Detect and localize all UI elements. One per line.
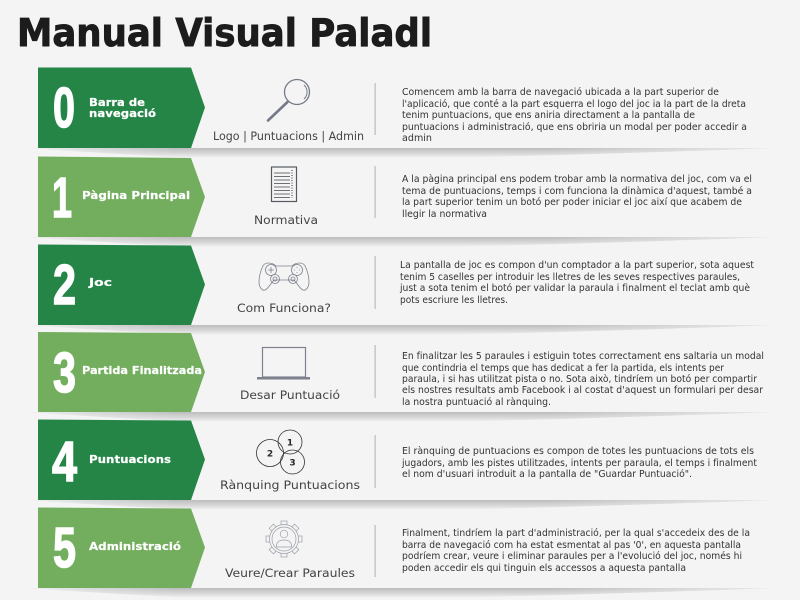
title: Manual Visual Paladl: [17, 11, 432, 56]
number 2: 2: [53, 253, 76, 317]
text block 1: la part superior tenim un botó per poder iniciar el joc així que acabem de: [402, 197, 742, 208]
chevron 1: [38, 156, 205, 237]
text block 2: tenim 5 caselles per introduir les lletres de les seves respectives paraules,: [400, 272, 740, 283]
text block 4: el nom d'usuari introduit a la pantalla de "Guardar Puntuació".: [402, 469, 692, 480]
heading: Barra de navegació: Barra de: [89, 96, 145, 109]
number 4: 4: [52, 430, 77, 494]
label: Desar Puntuació: Desar Puntuació: [240, 389, 340, 402]
text block 5: podríem crear, veure i eliminar paraules per a l'evolució del joc, només hi: [402, 551, 742, 562]
text block 5: [402, 528, 750, 574]
text block 5: barra de navegació com ha estat esmentat al pas '0', en aquesta pantalla: [402, 540, 741, 551]
text block 0: puntuacions i administració, que ens obriria un modal per poder accedir a: [402, 122, 747, 133]
icon: gear with user: [266, 521, 302, 557]
label: Normativa: Normativa: [254, 214, 318, 227]
heading: Puntuacions: Puntuacions: [89, 453, 171, 466]
chevron 4: [38, 420, 205, 500]
divider 3: [374, 345, 376, 398]
heading: Barra de navegació: [89, 96, 156, 120]
text block 0: [402, 87, 747, 144]
text block 0: Comencem amb la barra de navegació ubicada a la part superior de: [402, 87, 719, 98]
text block 2: La pantalla de joc es compon d'un comptador a la part superior, sota aquest: [400, 260, 754, 271]
text block 3: que contindria el temps que has dedicat a fer la partida, els intents per: [402, 363, 724, 374]
text block 2: pots escriure les lletres.: [400, 295, 508, 306]
text block 5: poden accedir els qui tinguin els accessos a aquesta pantalla: [402, 563, 686, 574]
text block 4: jugadors, amb les pistes utilitzades, intents per paraula, el temps i finalment: [401, 458, 757, 469]
icon: ranking circles: 3: [289, 458, 296, 468]
text block 3: els nostres resultats amb Facebook i al costat d'aquest un formulari per desar: [402, 385, 763, 396]
heading: Partida Finalitzada: Partida Finalitzada: [82, 364, 202, 377]
panel: step 3: [38, 332, 764, 412]
icon: laptop: [257, 348, 310, 380]
icon: document: [272, 167, 296, 202]
divider 5: [374, 525, 376, 577]
text block 1: llegir la normativa: [402, 209, 487, 220]
panel: step 5: [38, 508, 750, 588]
divider 2: [374, 256, 376, 309]
text block 0: admin: [402, 133, 432, 144]
panel: step 2: [38, 244, 754, 325]
chevron 5: [38, 508, 205, 588]
panel: step 0: [38, 68, 747, 148]
divider 0: [374, 83, 376, 135]
text block 4: El rànquing de puntuacions es compon de totes les puntuacions de tots els: [402, 446, 754, 457]
text block 1: [402, 174, 752, 220]
text block 5: Finalment, tindríem la part d'administració, per la qual s'accedeix des de la: [402, 528, 750, 539]
text block 2: [399, 260, 754, 306]
text block 4: [401, 446, 757, 480]
divider 4: [374, 435, 376, 488]
text block 3: la nostra puntuació al rànquing.: [402, 397, 551, 408]
panel: step 1: [38, 156, 752, 237]
heading: Pàgina Principal: Pàgina Principal: [82, 189, 190, 202]
text block 0: l'aplicació, que conté a la part esquerra el logo del joc ia la part de la dreta: [402, 99, 746, 110]
icon: ranking circles: 2: [267, 450, 273, 460]
chevron 3: [38, 332, 205, 412]
text block 3: [402, 351, 764, 408]
icon: magnifier: [268, 80, 310, 120]
text block 3: paraula, i si has utilitzat pista o no. Sota això, tindríem un botó per compartir: [402, 374, 757, 385]
chevron 0: [38, 68, 205, 148]
text block 1: A la pàgina principal ens podem trobar amb la normativa del joc, com va el: [402, 174, 752, 185]
chevron 2: [38, 244, 205, 325]
label: Rànquing Puntuacions: Rànquing Puntuacions: [220, 479, 360, 492]
divider 1: [374, 166, 376, 218]
label: Logo | Puntuacions | Admin: Logo | Puntuacions | Admin: [213, 130, 364, 143]
number 0: 0: [53, 76, 75, 140]
text block 3: En finalitzar les 5 paraules i estiguin totes correctament ens saltaria un modal: [402, 351, 764, 362]
icon: game controller: [259, 263, 309, 290]
label: Com Funciona?: Com Funciona?: [237, 302, 331, 315]
text block 1: tema de puntuacions, temps i com funciona la dinàmica d'aquest, també a: [402, 186, 752, 197]
heading: Joc: Joc: [88, 276, 112, 289]
icon: ranking circles: 1: [287, 438, 293, 448]
number 3: 3: [53, 341, 76, 405]
text block 2: just a sota tenim el botó per validar la paraula i finalment el teclat amb què: [399, 283, 750, 294]
number 1: 1: [52, 166, 72, 230]
heading: Barra de navegació: navegació: [89, 107, 156, 120]
label: Veure/Crear Paraules: Veure/Crear Paraules: [225, 567, 355, 580]
number 5: 5: [53, 516, 76, 580]
icon: ranking circles: [256, 430, 304, 474]
panel: step 4: [38, 420, 757, 500]
heading: Administració: Administració: [89, 540, 181, 553]
text block 0: tenim puntuacions, que ens aniria directament a la pantalla de: [402, 110, 695, 121]
